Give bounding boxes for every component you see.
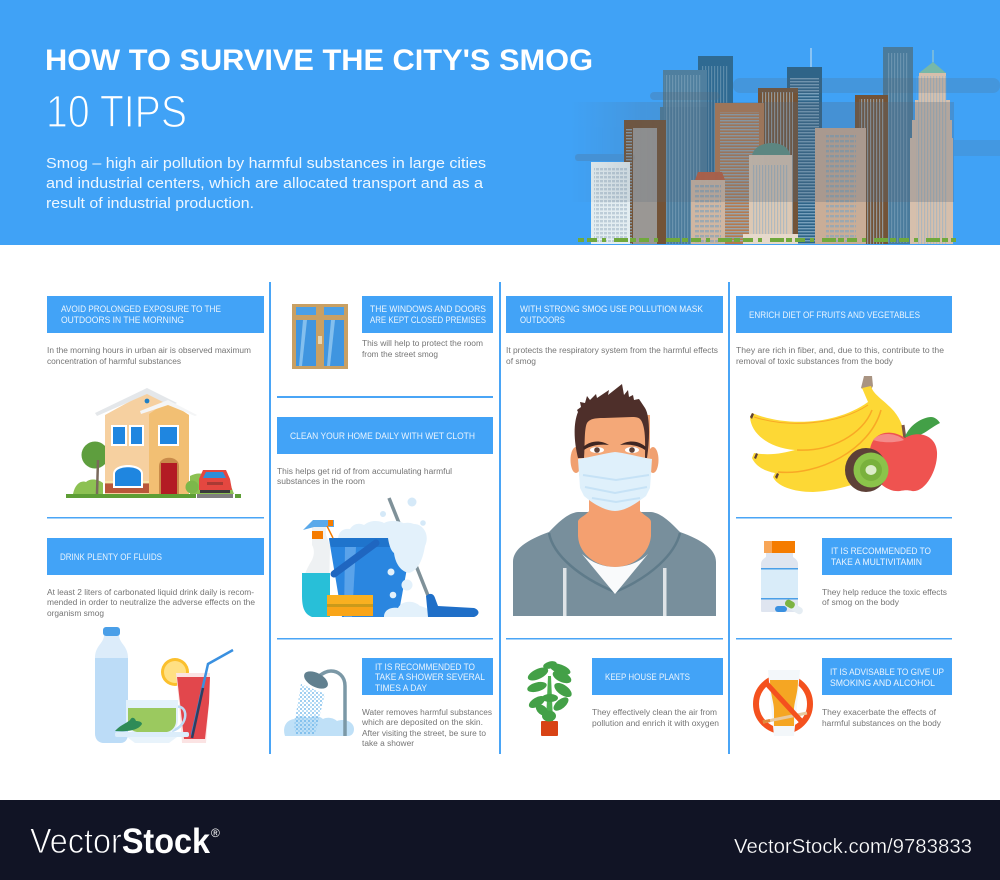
heading box: IT IS ADVISABLE TO GIVE UP [830,667,944,677]
panel: fruits and vegetables [736,296,952,492]
heading box: IT IS RECOMMENDED TO [375,662,475,672]
icon: cleaning supplies [302,498,478,617]
icon: bananas, apple and kiwi [750,376,940,492]
footer url: VectorStock.com/9783833 [734,836,972,858]
panel: house plants [526,658,723,736]
body text: They are rich in fiber, and, due to this, contribute to the [736,346,945,355]
heading box: TIMES A DAY [375,683,427,693]
registered mark: ® [211,826,220,840]
body text [361,708,492,748]
heading box [47,538,264,575]
body text: take a shower [362,739,414,748]
body text [47,346,251,366]
body text: mended in order to neutralize the adverse effects on the [47,598,256,607]
icon: shower [284,668,354,736]
heading box: ARE KEPT CLOSED PREMISES [370,315,486,325]
heading box [822,658,952,695]
body text: It protects the respiratory system from the harmful effects [506,346,718,355]
body text: of smog on the body [822,598,899,607]
heading box: IT IS RECOMMENDED TO [831,546,931,556]
icon: man wearing mask [513,384,716,616]
heading box [362,658,493,695]
heading box: DRINK PLENTY OF FLUIDS [60,552,162,562]
subtitle: 10 tips: 10 TIPS [46,86,187,137]
panel: multivitamin [761,538,952,615]
heading box [592,658,723,695]
body text: They exacerbate the effects of [822,708,937,717]
street trees [578,238,956,242]
body text [47,588,256,618]
panel: avoid morning exposure [47,296,264,498]
heading box [362,296,493,333]
heading box: OUTDOORS IN THE MORNING [61,315,184,325]
intro paragraph: Smog – high air pollution by harmful substances in large cities [46,155,486,172]
body text: from the street smog [362,350,438,359]
body text: After visiting the street, be sure to [362,729,487,738]
intro paragraph: and industrial centers, which are allocated transport and as a [46,175,484,192]
body text [736,346,945,366]
icon: potted plant [526,660,574,736]
body text: substances in the room [277,477,365,486]
intro paragraph [46,155,486,212]
icon: vitamin bottle with pills [761,541,804,615]
panel: shower [284,658,493,748]
icon: window [292,304,348,369]
smog bands [570,78,1000,202]
heading box: WITH STRONG SMOG USE POLLUTION MASK [520,304,703,314]
body text: This helps get rid of from accumulating harmful [277,467,452,476]
column dividers [47,282,952,754]
body text: removal of toxic substances from the body [736,357,893,366]
body text: They help reduce the toxic effects [822,588,947,597]
heading box: TAKE A SHOWER SEVERAL [375,672,485,682]
icon: drinks [95,627,233,743]
body text: In the morning hours in urban air is observed maximum [47,346,251,355]
body text: harmful substances on the body [822,719,941,728]
body text: They effectively clean the air from [592,708,717,717]
heading box: TAKE A MULTIVITAMIN [831,557,922,567]
heading box: KEEP HOUSE PLANTS [605,672,690,682]
heading box: AVOID PROLONGED EXPOSURE TO THE [61,304,221,314]
body text [362,339,483,359]
heading box: OUTDOORS [520,315,565,325]
header band [0,0,1000,245]
heading box [277,417,493,454]
heading box [736,296,952,333]
body text: organism smog [47,609,104,618]
heading box: THE WINDOWS AND DOORS [370,304,486,314]
body text: which are deposited on the skin. [361,718,483,727]
heading box [47,296,264,333]
title: HOW TO SURVIVE THE CITY'S SMOG [45,44,593,77]
illustration: city skyline in smog [570,47,1000,244]
intro paragraph: result of industrial production. [46,195,254,212]
footer band [0,800,1000,880]
body text: This will help to protect the room [362,339,483,348]
heading box: ENRICH DIET OF FRUITS AND VEGETABLES [749,310,920,320]
body text: At least 2 liters of carbonated liquid drink daily is recom- [47,588,254,597]
icon: prohibited beer and cigarette [756,670,810,736]
body text: concentration of harmful substances [47,357,181,366]
body text [277,467,452,486]
heading box [822,538,952,575]
body text: of smog [506,357,536,366]
body text [822,708,941,728]
panel: clean home [277,417,493,617]
icon: house with car [66,388,241,498]
body text [592,708,719,728]
body text [822,588,947,607]
body text [506,346,718,366]
panel: drink fluids [47,538,264,743]
panel: pollution mask [506,296,723,616]
panel: keep windows closed [292,296,493,369]
heading box: SMOKING AND ALCOHOL [830,678,935,688]
panel: no smoking or alcohol [756,658,952,736]
body text: Water removes harmful substances [362,708,492,717]
heading box: CLEAN YOUR HOME DAILY WITH WET CLOTH [290,431,475,441]
footer logo: VectorStock [30,822,210,861]
heading box [506,296,723,333]
body text: pollution and enrich it with oxygen [592,719,719,728]
